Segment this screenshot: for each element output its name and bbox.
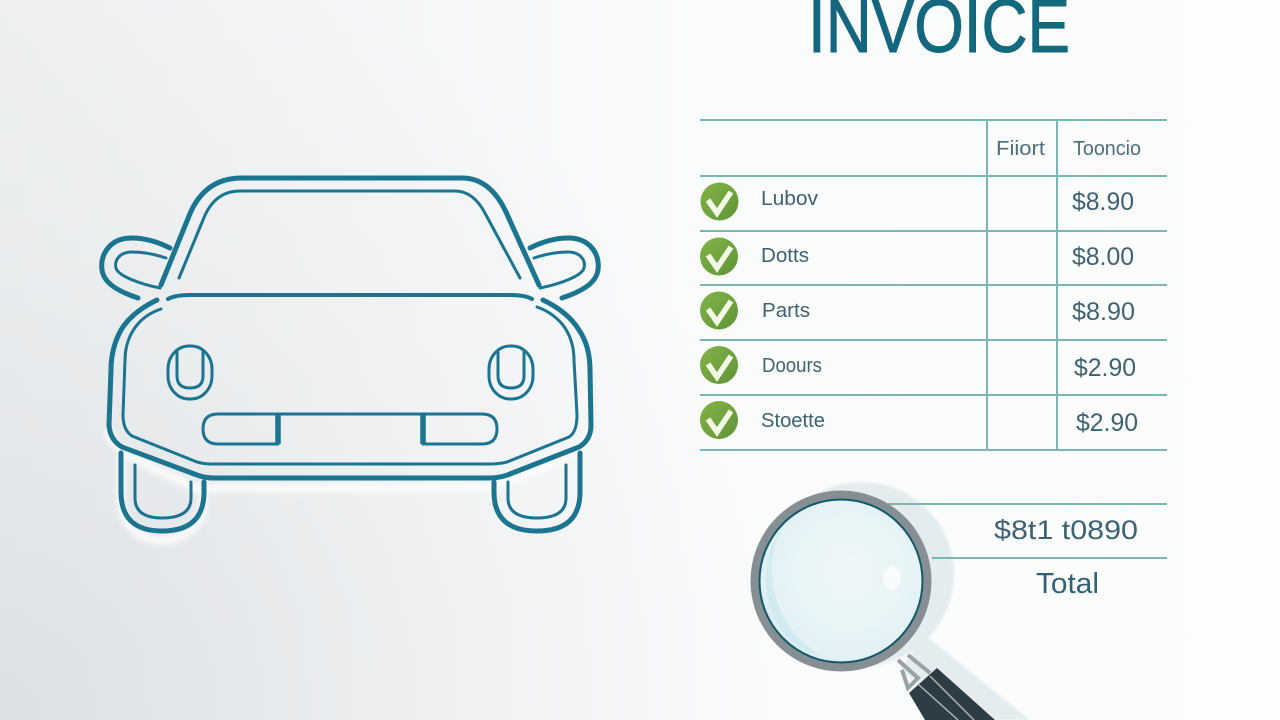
- row: Parts: [700, 292, 1135, 330]
- car hood line: [168, 295, 532, 299]
- row: Lubov: $8.90: [1072, 188, 1134, 216]
- row: Dotts: [700, 238, 1134, 276]
- grille: [203, 414, 497, 444]
- row: Doours: [700, 346, 1136, 384]
- row: Doours: $2.90: [1074, 354, 1136, 382]
- car soft white glow: [109, 433, 591, 541]
- magnifier connector: [898, 655, 930, 688]
- right headlight: [489, 346, 533, 399]
- car body inner outline: [123, 307, 577, 464]
- row: Stoette: Stoette: [761, 410, 825, 432]
- left headlight: [168, 346, 212, 399]
- table header: Tooncio: [1073, 138, 1141, 160]
- left wheel: [121, 453, 204, 531]
- icon: magnifying glass: [755, 495, 995, 720]
- car roof outline: [161, 178, 539, 285]
- lens highlight: [766, 525, 820, 655]
- magnifier shadow: [770, 482, 1030, 720]
- row: Doours: Doours: [762, 355, 822, 377]
- row: Parts: $8.90: [1072, 298, 1135, 326]
- right wheel: [494, 453, 580, 531]
- row: Lubov: [700, 182, 1134, 220]
- total label: Total: [1036, 568, 1099, 600]
- table header: [996, 138, 1141, 160]
- row: Dotts: Dotts: [761, 245, 809, 267]
- total amount: $8t1 t0890: [994, 515, 1138, 545]
- row: Stoette: $2.90: [1076, 409, 1138, 437]
- table rules: [700, 120, 1167, 450]
- total rules: [888, 504, 1167, 558]
- icon: car front view: [102, 178, 598, 541]
- row: Dotts: $8.00: [1072, 243, 1134, 271]
- left mirror: [102, 238, 170, 298]
- right mirror: [530, 238, 598, 298]
- car windshield: [179, 191, 520, 278]
- row: Stoette: [700, 401, 1138, 439]
- car body outer outline: [109, 300, 591, 478]
- magnifier handle: [909, 668, 995, 720]
- table header: Fiiort: [996, 138, 1045, 160]
- row: Lubov: Lubov: [761, 188, 818, 210]
- magnifier rim: [755, 495, 927, 667]
- row: Parts: Parts: [762, 300, 810, 322]
- total block: [888, 504, 1167, 600]
- invoice table: [700, 120, 1167, 450]
